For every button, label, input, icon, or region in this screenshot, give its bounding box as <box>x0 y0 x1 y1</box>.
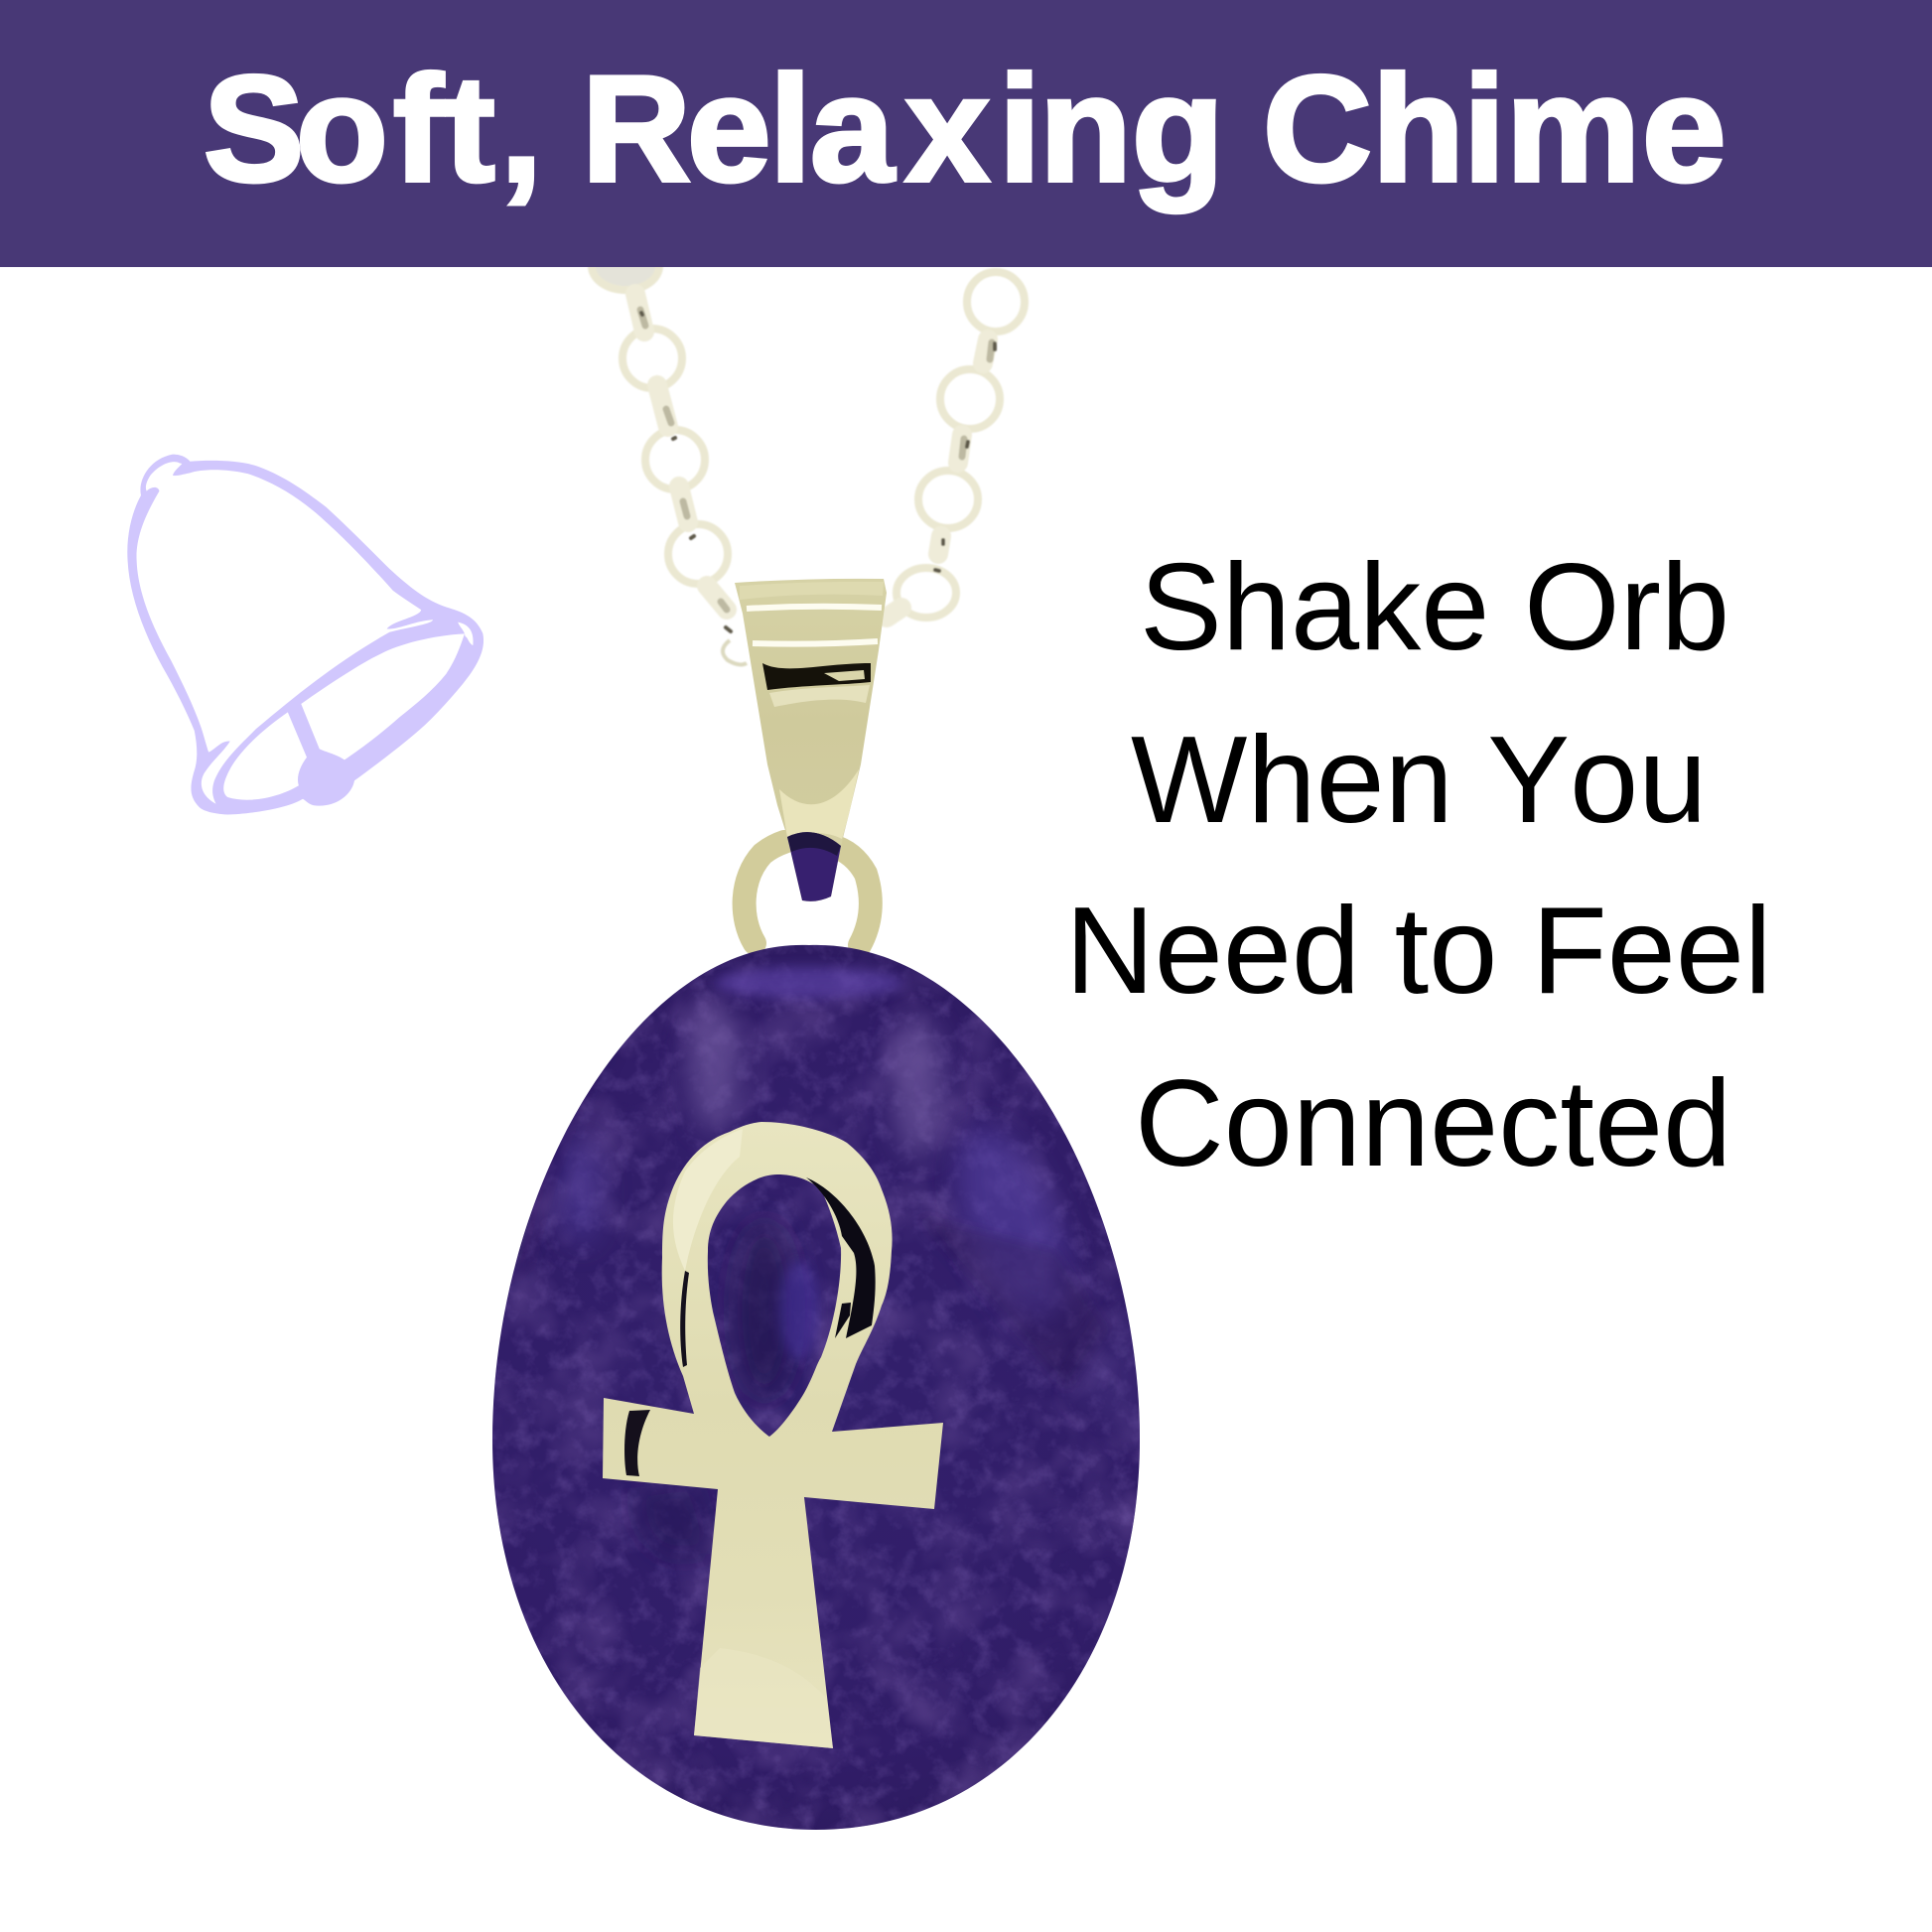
body copy: shake orb message: Connected <box>1135 1054 1731 1192</box>
ring connector <box>745 842 871 945</box>
body copy: shake orb message: Need to Feel <box>1065 882 1772 1020</box>
chain: left strand <box>592 242 747 664</box>
icon: bell <box>127 455 483 815</box>
header banner <box>0 0 1932 267</box>
ankh symbol <box>603 1122 943 1748</box>
body copy: shake orb message: Shake Orb <box>1140 538 1729 676</box>
chain: right strand <box>887 272 1025 618</box>
orb pendant <box>477 933 1152 1847</box>
bail <box>735 579 887 901</box>
body copy: shake orb message: When You <box>1131 711 1707 849</box>
title: Soft, Relaxing Chime <box>204 45 1726 213</box>
